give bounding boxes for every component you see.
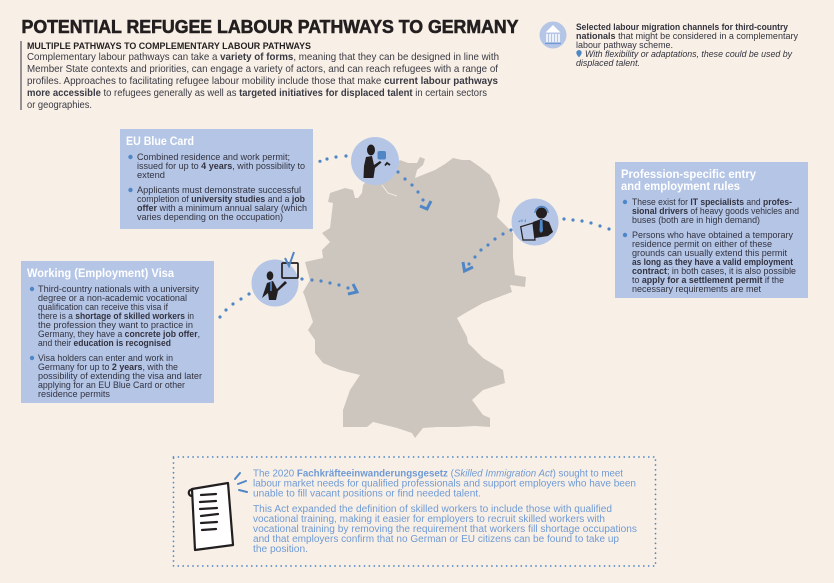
intro subheading: MULTIPLE PATHWAYS TO COMPLEMENTARY LABOUR PATHWAYS bbox=[27, 41, 311, 52]
icon: institution bbox=[540, 22, 566, 48]
bullet: IT and drivers: sional drivers of heavy goods vehicles and bbox=[632, 206, 799, 216]
bullet: combined permit: extend bbox=[137, 170, 165, 180]
bullet: temporary permit bbox=[623, 230, 796, 294]
callout text: the position. bbox=[253, 544, 308, 555]
icon: pin bbox=[576, 50, 582, 57]
bullet: eligibility: Third-country nationals with a university bbox=[38, 284, 199, 294]
legend bbox=[540, 22, 799, 68]
bullet: eligibility bbox=[30, 284, 200, 348]
bullet: eligibility: Germany, they have a concrete job offer, bbox=[38, 329, 200, 339]
callout text: unable to fill vacant positions or find needed talent. bbox=[253, 488, 481, 500]
legend text: nationals that might be considered in a complementary bbox=[576, 31, 799, 41]
intro paragraph: Complementary labour pathways can take a variety of forms, meaning that they can be designed in line with bbox=[27, 51, 499, 63]
dotted arrow: Blue Card to map bbox=[318, 154, 431, 209]
bullet: applicants: offer with a minimum annual salary (which bbox=[137, 203, 307, 213]
bullet: duration: residence permits bbox=[38, 389, 111, 399]
intro paragraph: Member State contexts and priorities, can engage a variety of actors, and can reach refugees with a range of bbox=[27, 63, 498, 75]
dotted arrow: Working Visa to map bbox=[218, 277, 357, 319]
heading: Profession-specific: Profession-specific entry bbox=[621, 169, 757, 181]
bullet: applicants bbox=[128, 185, 307, 222]
legend text: With flexibility or adaptations, these could be used by bbox=[585, 49, 793, 59]
bullet: eligibility: qualification can receive this visa if bbox=[38, 302, 168, 312]
bullet: temporary permit: grounds can usually extend this permit bbox=[632, 248, 787, 258]
callout text bbox=[253, 468, 637, 555]
bullet: duration: possibility of extending the visa and later bbox=[38, 371, 202, 381]
intro paragraph: more accessible to refugees generally as well as targeted initiatives for displaced talent in certain sectors bbox=[27, 87, 487, 99]
bullet: temporary permit: necessary requirements are met bbox=[632, 284, 761, 294]
bullet: eligibility: and their education is recognised bbox=[38, 338, 171, 348]
intro paragraph: profiles. Approaches to facilitating refugee labour mobility include those that make current labour pathways bbox=[27, 75, 498, 87]
bullet: IT and drivers: These exist for IT specialists and profes- bbox=[632, 197, 792, 207]
bullet: applicants: Applicants must demonstrate successful bbox=[137, 185, 301, 195]
callout: Skilled Immigration Act bbox=[174, 457, 656, 566]
bullet: combined permit: Combined residence and work permit; bbox=[137, 152, 290, 162]
callout text: This Act expanded the definition of skilled workers to include those with qualified bbox=[253, 504, 612, 515]
bullet: duration: Germany for up to 2 years, with the bbox=[38, 362, 178, 372]
bullet: applicants: varies depending on the occupation) bbox=[137, 212, 283, 222]
icon: person with card bbox=[351, 137, 399, 185]
heading: Working Visa: Working (Employment) Visa bbox=[27, 268, 175, 280]
panel: Working (Employment) Visa bbox=[21, 261, 214, 403]
bullet: temporary permit: to apply for a settlement permit if the bbox=[632, 275, 784, 285]
legend text: labour pathway scheme. bbox=[576, 40, 673, 50]
dotted arrow: Profession rules to map bbox=[463, 217, 611, 271]
panel: EU Blue Card bbox=[120, 129, 313, 229]
bullet: combined permit: issued for up to 4 years, with possibility to bbox=[137, 161, 305, 171]
bullet: combined permit bbox=[128, 152, 305, 180]
bullet: eligibility: there is a shortage of skilled workers in bbox=[38, 311, 194, 321]
intro paragraph: or geographies. bbox=[27, 99, 92, 111]
icon: document scroll bbox=[189, 473, 247, 550]
heading: EU Blue Card: EU Blue Card bbox=[126, 136, 194, 148]
bullet: applicants: completion of university studies and a job bbox=[137, 194, 305, 204]
callout text: and that employers confirm that no German or EU citizens can be found to take up bbox=[253, 534, 620, 545]
icon: person with headset at laptop bbox=[512, 198, 558, 246]
bullet: duration: Visa holders can enter and work in bbox=[38, 353, 173, 363]
title: POTENTIAL REFUGEE LABOUR PATHWAYS TO GERMANY bbox=[22, 16, 519, 37]
bullet: temporary permit: residence permit on either of these bbox=[632, 239, 772, 249]
bullet: temporary permit: contract; in both cases, it is also possible bbox=[632, 266, 796, 276]
bullet: temporary permit: Persons who have obtained a temporary bbox=[632, 230, 793, 240]
bullet: eligibility: the profession they want to practice in bbox=[38, 320, 193, 330]
bullet: duration bbox=[30, 353, 202, 399]
bullet: temporary permit: as long as they have a valid employment bbox=[632, 257, 793, 267]
map of Germany bbox=[303, 157, 526, 438]
intro text block bbox=[20, 41, 499, 111]
bullet: IT and drivers: buses (both are in high demand) bbox=[632, 215, 760, 225]
callout text: labour market needs for qualified professionals and support employers who have been bbox=[253, 478, 636, 490]
heading: Profession-specific bbox=[621, 169, 757, 193]
legend text: Selected labour migration channels for third-country bbox=[576, 22, 788, 32]
callout text: The 2020 Fachkräfteeinwanderungsgesetz (Skilled Immigration Act) sought to meet bbox=[253, 468, 623, 480]
bullet: IT and drivers bbox=[623, 197, 799, 225]
icon: person with checklist bbox=[252, 252, 298, 306]
heading: Profession-specific: and employment rules bbox=[621, 181, 740, 193]
legend text: displaced talent. bbox=[576, 58, 640, 68]
callout text: vocational training, making it easier for employers to recruit skilled workers with bbox=[253, 514, 605, 525]
bullet: duration: applying for an EU Blue Card or other bbox=[38, 380, 185, 390]
callout text: vocational training by removing the requirement that workers fill shortage occupations bbox=[253, 524, 637, 535]
bullet: eligibility: degree or a non-academic vocational bbox=[38, 293, 187, 303]
legend text bbox=[576, 22, 799, 68]
panel: Profession-specific entry bbox=[615, 162, 808, 298]
intro paragraph bbox=[27, 51, 499, 111]
